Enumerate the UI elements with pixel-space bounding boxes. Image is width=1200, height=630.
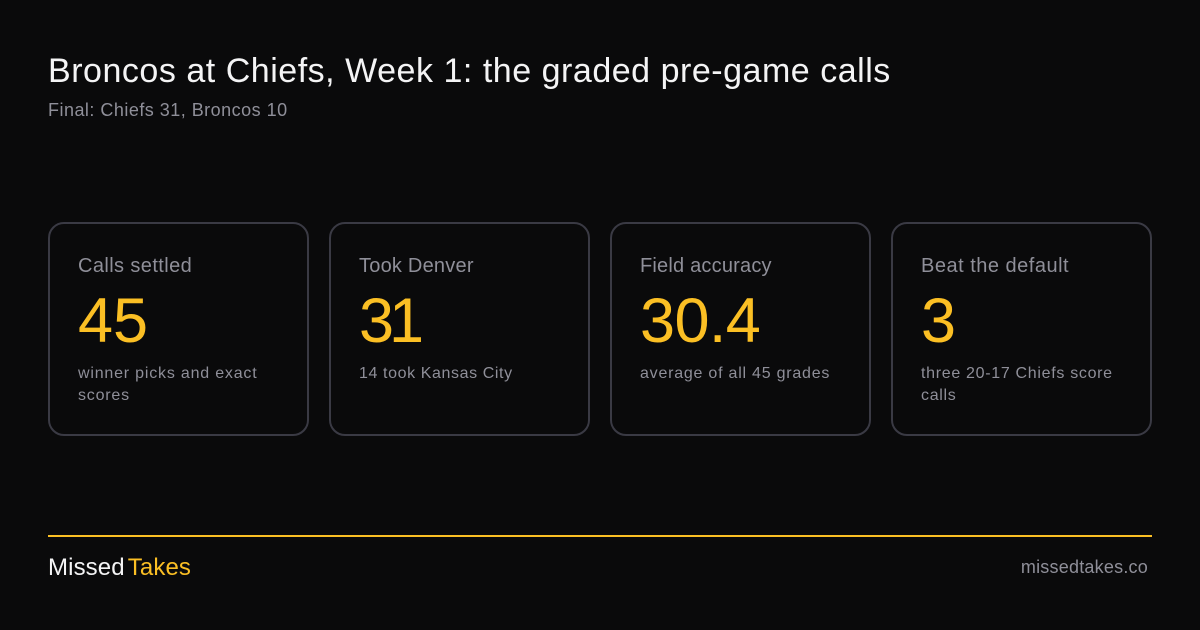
- description: field accuracy: average of all 45 grades: [640, 365, 830, 382]
- label: beat the default: Beat the default: [921, 255, 1069, 277]
- panel: field accuracy: [610, 222, 871, 436]
- brand wordmark: MissedTakes: [48, 554, 191, 581]
- number: 31: 31: [359, 286, 419, 356]
- title: Broncos at Chiefs, Week 1: the graded pre-game calls: [48, 52, 891, 90]
- description: calls settled: winner picks and exact: [78, 365, 257, 382]
- subtitle: Final: Chiefs 31, Broncos 10: [48, 100, 288, 120]
- panel: beat the default: [891, 222, 1152, 436]
- description: beat the default: calls: [921, 387, 956, 404]
- site url: missedtakes.co: [1021, 557, 1148, 577]
- description: beat the default: three 20-17 Chiefs score: [921, 365, 1113, 382]
- description: took Denver: 14 took Kansas City: [359, 365, 513, 382]
- description: beat the default: [921, 365, 1113, 404]
- label: calls settled: Calls settled: [78, 255, 192, 277]
- footer rule: [48, 535, 1152, 537]
- panel: calls settled: [48, 222, 309, 436]
- number: 30.4: 30.4: [640, 286, 760, 356]
- label: took Denver: Took Denver: [359, 255, 474, 277]
- panel: took Denver: [329, 222, 590, 436]
- description: calls settled: scores: [78, 387, 130, 404]
- description: calls settled: [78, 365, 257, 404]
- label: field accuracy: Field accuracy: [640, 255, 772, 277]
- number: 3: 3: [921, 286, 956, 356]
- number: 45: 45: [78, 286, 148, 356]
